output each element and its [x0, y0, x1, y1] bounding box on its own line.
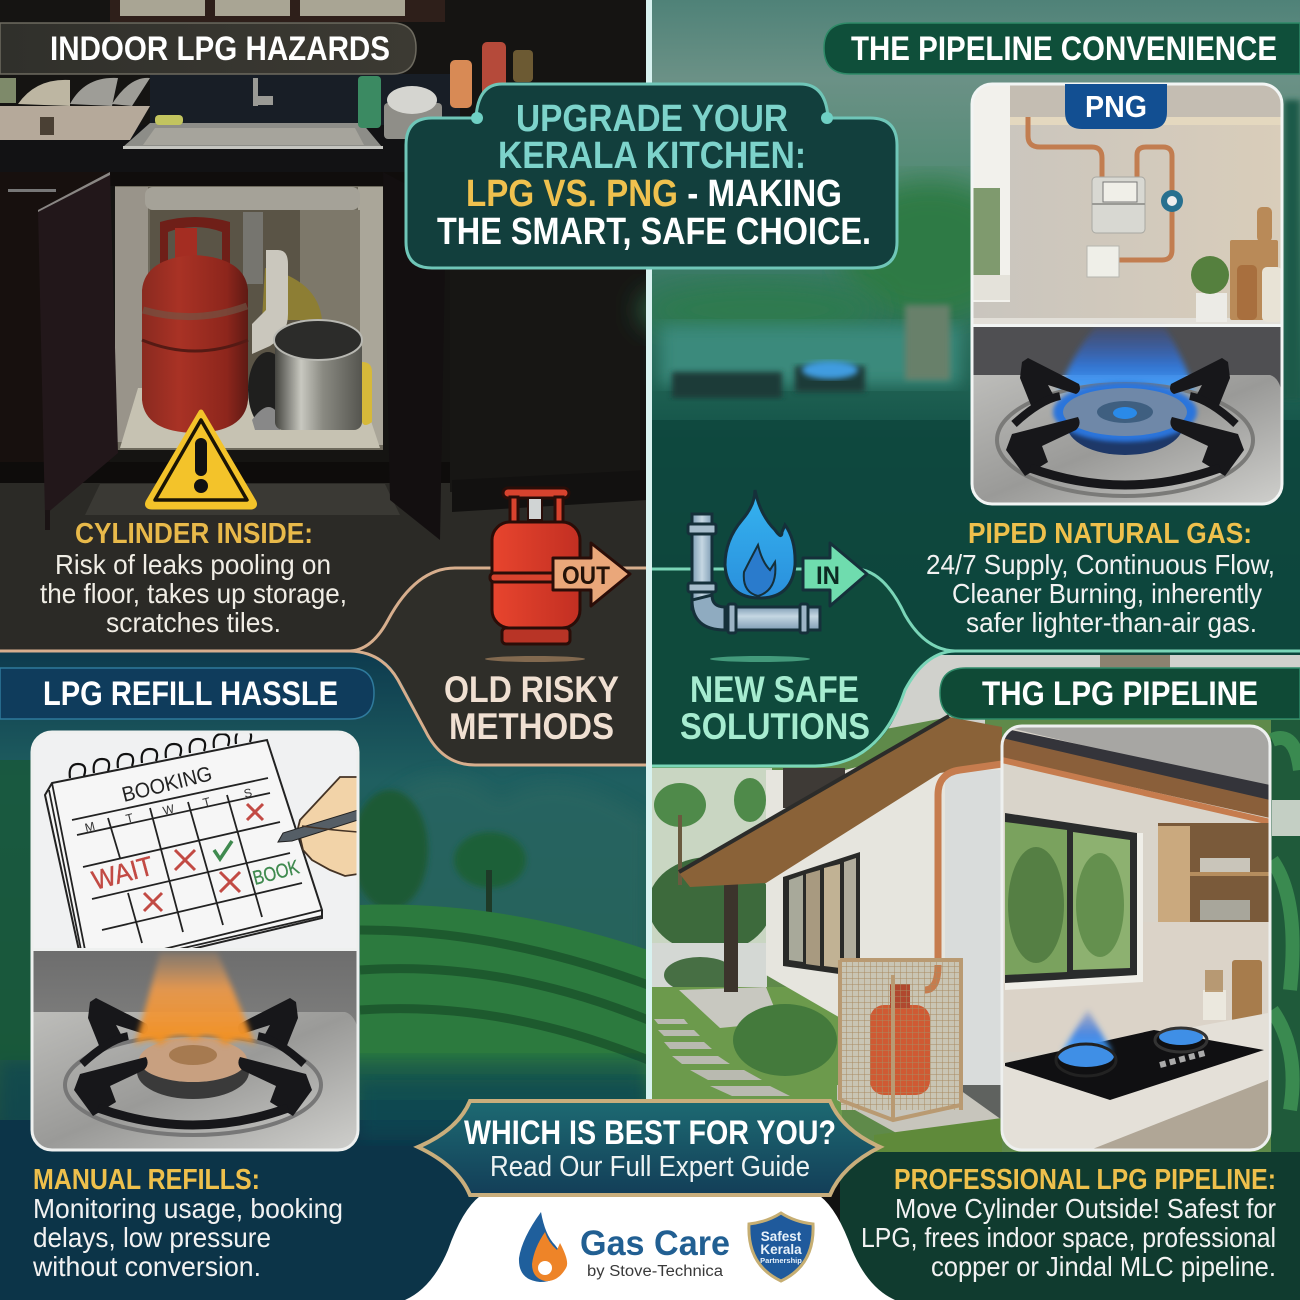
- card border: kitchen photo: [1002, 726, 1270, 1150]
- title text: [437, 98, 871, 253]
- text block: piped natural gas: Cleaner Burning, inherently: [952, 578, 1262, 609]
- icon label: IN: IN: [816, 562, 840, 590]
- photo card: modern kitchen: [1002, 726, 1270, 1150]
- icon label: OUT: OUT: [562, 562, 610, 590]
- kitchen window: [1005, 833, 1143, 990]
- calendar page: [45, 730, 322, 955]
- heading: new safe solutions: NEW SAFE: [690, 669, 859, 710]
- heading: LPG refill hassle: [0, 668, 374, 719]
- icon: red LPG cylinder with OUT arrow: [485, 488, 630, 662]
- red cylinder under sink: [142, 217, 248, 433]
- title text: KERALA KITCHEN:: [498, 135, 806, 177]
- calendar marks: [144, 804, 263, 911]
- counter top: [1004, 1013, 1268, 1150]
- photo card: PNG meter and blue flame: [972, 84, 1282, 504]
- text block: cylinder inside: [40, 518, 347, 638]
- icon: warning triangle: [148, 412, 254, 507]
- badge: PNG: PNG: [1085, 89, 1147, 124]
- calendar weekday letters: T: [124, 810, 135, 826]
- text block: piped natural gas: 24/7 Supply, Continuous Flow,: [926, 549, 1275, 580]
- logo: Gas Care: by Stove-Technica: [587, 1263, 723, 1280]
- text block: manual refills: delays, low pressure: [33, 1222, 271, 1253]
- banner: which is best for you: [418, 1101, 880, 1195]
- badge: safest Kerala partnership: Safest: [761, 1229, 802, 1244]
- text block: piped natural gas: PIPED NATURAL GAS:: [968, 518, 1252, 550]
- text block: manual refills: [32, 1164, 343, 1282]
- text block: piped natural gas: safer lighter-than-air gas.: [966, 607, 1257, 638]
- heading: indoor LPG hazards: INDOOR LPG HAZARDS: [50, 30, 390, 68]
- icon: pipe with blue flame and IN arrow: [688, 490, 867, 662]
- text block: piped natural gas: [926, 518, 1275, 638]
- marble splashback: [1002, 922, 1270, 1052]
- heading: THG LPG pipeline: THG LPG PIPELINE: [982, 675, 1258, 713]
- card border: booking photo: [32, 732, 358, 1150]
- walls: [766, 730, 1002, 1120]
- logo: Gas Care: Gas Care: [580, 1224, 730, 1263]
- icon: logo flame: [519, 1212, 567, 1282]
- calendar weekday letters: T: [201, 794, 212, 810]
- open cabinet under the sink: [38, 172, 446, 540]
- title text: THE SMART, SAFE CHOICE.: [437, 211, 871, 253]
- title text: LPG VS. PNG - MAKING: [466, 173, 842, 215]
- calendar weekday letters: M: [83, 819, 96, 835]
- icon: hand with pen: [278, 777, 358, 876]
- vertical centre divider: [646, 0, 652, 1105]
- background: teal pipeline quadrant: [640, 0, 1300, 655]
- card border: PNG photo: [972, 84, 1282, 504]
- background: blue-green hills quadrant: [0, 650, 648, 1300]
- soffit and dark roof edge: [679, 717, 1002, 887]
- heading: old risky methods: OLD RISKY: [444, 669, 619, 710]
- title panel: [406, 84, 897, 268]
- text block: cylinder inside: scratches tiles.: [106, 607, 281, 638]
- heading: THG LPG pipeline: [940, 668, 1300, 719]
- banner: which is best for you: Read Our Full Expert Guide: [490, 1151, 810, 1183]
- calendar weekday letters: [85, 788, 252, 832]
- photo card: booking calendar and orange flame: [32, 730, 358, 1150]
- heading: LPG refill hassle: LPG REFILL HASSLE: [43, 675, 338, 713]
- sky and trees: [652, 768, 772, 948]
- text block: cylinder inside: Risk of leaks pooling on: [55, 549, 331, 580]
- logo: Gas Care: [519, 1212, 730, 1282]
- wall cabinet: [1158, 823, 1270, 922]
- calendar weekday letters: S: [242, 785, 254, 801]
- jungle strip: [1271, 720, 1300, 1160]
- calendar label: wait: WAIT: [89, 851, 156, 896]
- text block: manual refills: MANUAL REFILLS:: [33, 1164, 260, 1196]
- badge: PNG: [1065, 84, 1167, 129]
- mesh cage with cylinder: [840, 960, 961, 1120]
- concrete and grass: [837, 1085, 1002, 1135]
- utensils and boards: [1203, 990, 1226, 1020]
- badge: safest Kerala partnership: [749, 1213, 813, 1281]
- glass cooktop: [1005, 1030, 1264, 1100]
- panel: new safe solutions: [652, 568, 1300, 766]
- panel: old risky methods: [0, 568, 646, 765]
- calendar label: book: BOOK: [251, 856, 302, 890]
- text block: professional LPG pipeline: copper or Jindal MLC pipeline.: [931, 1251, 1276, 1282]
- banner: which is best for you: WHICH IS BEST FOR YOU?: [464, 1114, 836, 1152]
- small upper window: [783, 768, 845, 808]
- text block: professional LPG pipeline: [861, 1164, 1276, 1282]
- pale roof above the fascia: [880, 655, 1300, 730]
- heading: new safe solutions: SOLUTIONS: [680, 706, 870, 747]
- badge: safest Kerala partnership: Partnership: [760, 1256, 802, 1265]
- text block: manual refills: without conversion.: [32, 1251, 261, 1282]
- title text: UPGRADE YOUR: [516, 98, 788, 140]
- copper pipe: [938, 764, 1002, 960]
- background: house with external cylinder: [648, 655, 1300, 1300]
- text block: cylinder inside: CYLINDER INSIDE:: [75, 518, 313, 550]
- heading: indoor LPG hazards: [0, 23, 416, 74]
- text block: manual refills: Monitoring usage, booking: [33, 1193, 343, 1224]
- calendar weekday letters: W: [161, 801, 176, 818]
- sink and dish rack: [0, 42, 533, 149]
- white logo backing: [405, 1196, 895, 1300]
- window: [783, 852, 860, 977]
- heading: old risky methods: METHODS: [449, 706, 614, 747]
- steel pot: [248, 320, 372, 430]
- badge: safest Kerala partnership: Kerala: [760, 1242, 802, 1257]
- text block: cylinder inside: the floor, takes up storage,: [40, 578, 347, 609]
- background: dark indoor kitchen quadrant: [0, 0, 648, 650]
- calendar label: booking: BOOKING: [120, 762, 214, 807]
